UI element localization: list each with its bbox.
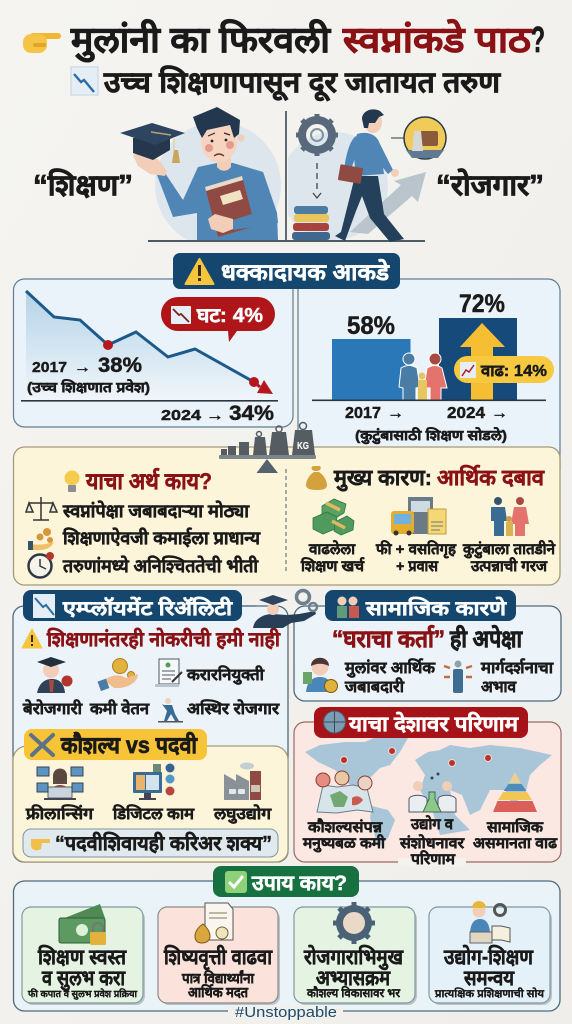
heading: main reason — [306, 464, 545, 492]
icon: pointing hand — [23, 33, 61, 53]
text: uncertainty: तरुणांमध्ये अनिश्चिततेची भीती — [62, 555, 259, 576]
text: lack of guidance: मार्गदर्शनाचा — [480, 658, 554, 677]
chart caption: (उच्च शिक्षणात प्रवेश) — [27, 379, 150, 395]
callout: career without degree: “पदवीशिवायही करिअर शक्य” — [55, 831, 272, 855]
icon: clock — [28, 552, 54, 578]
line chart — [26, 291, 254, 382]
torso and left arm — [157, 163, 278, 240]
2024 value: 2024 — [161, 407, 202, 424]
label: rising education cost: वाढलेला — [308, 540, 356, 558]
2017 value: 2017 — [32, 359, 67, 376]
yellow rising arrow — [460, 323, 505, 400]
card: job-oriented curriculum: अभ्यासक्रम — [316, 967, 391, 990]
panel: shocking stats right bar chart — [298, 279, 560, 470]
panel: meaning and main reason — [14, 447, 560, 585]
badge: skills vs degree — [24, 729, 207, 760]
panel: solutions — [14, 881, 560, 1016]
axis label 2024 — [447, 405, 508, 422]
label: unemployment: बेरोजगारी — [22, 699, 83, 718]
text: lack of guidance — [480, 658, 554, 696]
card: affordable education: व सुलभ करा — [41, 967, 126, 992]
text: financial responsibility: मुलांवर आर्थिक — [344, 658, 436, 678]
gap in panel border — [398, 858, 466, 866]
icon: scales — [26, 497, 57, 520]
card: industry education coordination: समन्वय — [463, 967, 515, 990]
section heading: impact on the country: याचा देशावर परिणाम — [348, 711, 520, 736]
panel: shocking stats left line chart — [14, 279, 293, 427]
world map — [305, 735, 552, 848]
label: education: “शिक्षण” — [33, 168, 133, 202]
section heading: employment reality — [23, 590, 242, 621]
section heading: employment reality: एम्प्लॉयमेंट रिॲलिटी — [62, 596, 233, 620]
label: fees hostel travel — [375, 540, 457, 575]
hand — [133, 153, 167, 176]
heading: no job guarantee: शिक्षणानंतरही नोकरीची हमी नाही — [46, 627, 281, 651]
text: financial responsibility: जबाबदारी — [344, 677, 405, 696]
bar: 2017 — [332, 339, 410, 400]
label: unstable employment: अस्थिर रोजगार — [187, 699, 281, 718]
icon: factory — [224, 762, 261, 800]
axis label 2017: 2017 — [345, 405, 381, 422]
line chart area — [26, 291, 272, 401]
section heading: impact on the country — [314, 707, 528, 738]
section heading: shocking stats — [173, 253, 400, 289]
label: rising education cost: शिक्षण खर्च — [300, 557, 366, 575]
title: स्वप्नांकडे पाठ — [342, 19, 533, 60]
card: industry education coordination — [429, 901, 552, 1005]
chart caption: (कुटुंबासाठी शिक्षण सोडले) — [355, 427, 507, 445]
value 72: 72% — [459, 290, 505, 318]
label: digital work: डिजिटल काम — [112, 804, 195, 823]
illustration: walking graduate heading to job — [280, 109, 446, 242]
2024 value — [161, 402, 274, 425]
section heading: solutions — [213, 866, 359, 897]
callout: career without degree — [23, 829, 278, 857]
callout: decline — [161, 297, 275, 342]
book under arm — [338, 164, 363, 184]
label: fewer skilled workforce: कौशल्यसंपन्न — [307, 818, 384, 836]
illustration: balance scale with weights — [219, 422, 316, 473]
panel: social reasons — [294, 606, 561, 701]
label: employment: “रोजगार” — [436, 168, 544, 202]
illustration: worried student with cap and book — [120, 107, 281, 248]
label: industry and research: उद्योग व — [410, 815, 454, 833]
section heading: social reasons — [325, 590, 516, 621]
subtitle: उच्च शिक्षणापासून दूर जातायत तरुण — [103, 65, 501, 102]
badge: skills vs degree: कौशल्य vs पदवी — [60, 731, 198, 758]
heading: main reason: मुख्य कारण: — [333, 465, 432, 492]
card: job-oriented curriculum: रोजगाराभिमुख — [303, 944, 404, 971]
icon: falling chart — [71, 67, 98, 95]
data points and arrow — [103, 340, 273, 394]
axis label 2017: → — [387, 405, 404, 422]
section heading: solutions: उपाय काय? — [251, 872, 347, 895]
icon: scientists — [409, 772, 456, 812]
label: fees hostel travel: + प्रवास — [396, 558, 439, 575]
text: financial responsibility — [344, 658, 436, 696]
icon: contract — [155, 659, 182, 687]
dashed arrow — [316, 163, 318, 193]
icon: confused person with arrows — [444, 660, 472, 693]
heading: head of household expectation: “घराचा कर्ता” — [332, 625, 445, 653]
title — [23, 19, 545, 63]
heading: head of household expectation — [332, 625, 523, 653]
card: industry education coordination: प्रात्यक्षिक प्रशिक्षणाची सोय — [434, 987, 545, 1000]
walker — [335, 176, 404, 242]
panel: impact on the country — [294, 722, 561, 868]
icon: inequality pyramid — [493, 772, 537, 812]
2024 value: → — [206, 407, 224, 424]
2017 value — [32, 354, 142, 377]
job circle — [391, 137, 404, 139]
label: family income need: कुटुंबाला तातडीने — [462, 540, 556, 559]
sub-panel: skills vs degree — [13, 746, 288, 862]
icon: unstable person — [158, 698, 183, 722]
card: scholarships: पात्र विद्यार्थ्यांना — [181, 970, 255, 986]
icon: money stacks — [313, 499, 354, 535]
heading: main reason: आर्थिक दबाव — [437, 464, 545, 490]
label: freelancing: फ्रीलान्सिंग — [25, 804, 94, 823]
text: earning priority: शिक्षणाऐवजी कमाईला प्राधान्य — [62, 527, 262, 548]
2024 value: 34% — [229, 402, 274, 425]
icon: family — [491, 497, 529, 536]
text: responsibility over dreams: स्वप्नांपेक्षा जबाबदाऱ्या मोठ्या — [62, 500, 250, 521]
gear — [296, 114, 338, 156]
label: industry and research — [399, 815, 465, 868]
value 58: 58% — [347, 312, 395, 340]
card: affordable education — [22, 904, 145, 1005]
icon: family — [399, 353, 447, 400]
label: contract appointment: करारनियुक्ती — [186, 665, 265, 685]
label: family income need — [462, 540, 556, 575]
section heading: shocking stats: धक्कादायक आकडे — [221, 258, 390, 285]
icon: map with pins — [316, 771, 373, 813]
heading: meaning: याचा अर्थ काय? — [85, 467, 212, 494]
icon: unemployed graduate — [37, 657, 72, 693]
icon: freelancer — [37, 767, 83, 800]
book hand — [208, 214, 233, 233]
text: lack of guidance: अभाव — [481, 679, 517, 696]
label: social inequality: सामाजिक — [486, 818, 545, 836]
label: fewer skilled workforce: मनुष्यबळ कमी — [302, 834, 386, 853]
label: industry and research: परिणाम — [410, 850, 456, 868]
card: affordable education: शिक्षण स्वस्त — [37, 944, 127, 969]
label: low wage: कमी वेतन — [89, 699, 150, 718]
right arm — [233, 172, 278, 230]
callout: decline: घट: 4% — [196, 305, 263, 327]
label: small industry: लघुउद्योग — [213, 804, 272, 824]
badge: growth: वाढ: 14% — [480, 363, 547, 380]
bar: 2024 — [439, 318, 517, 400]
label: fewer skilled workforce — [302, 818, 386, 853]
connector line — [242, 605, 256, 607]
icon: burdened child — [303, 658, 338, 692]
icon: digital work — [133, 764, 174, 800]
badge: growth — [454, 356, 554, 383]
icon: low pay — [98, 658, 138, 691]
up arrow — [350, 172, 426, 234]
axis label 2024: → — [491, 405, 508, 422]
card: scholarships: शिष्यवृत्ती वाढवा — [163, 944, 273, 971]
label: industry and research: संशोधनावर — [399, 834, 465, 852]
icon: bus and hostel — [391, 497, 446, 536]
illustration: thinking graduate with gears — [253, 590, 317, 628]
card: job-oriented curriculum — [294, 902, 417, 1005]
card: industry education coordination: उद्योग-शिक्षण — [443, 944, 534, 969]
label: fees hostel travel: फी + वसतिगृह — [375, 540, 457, 559]
label: rising education cost — [300, 540, 366, 575]
label: social inequality: असमानता वाढ — [473, 835, 558, 852]
cap — [133, 137, 170, 160]
heading: head of household expectation: ही अपेक्षा — [449, 625, 523, 653]
map pins — [340, 748, 492, 766]
axis label 2017 — [345, 405, 404, 422]
ground line — [148, 240, 425, 242]
card: job-oriented curriculum: कौशल्य विकासावर भर — [306, 986, 401, 1000]
title: ? — [531, 19, 545, 60]
card: affordable education: फी कपात व सुलभ प्रवेश प्रक्रिया — [27, 988, 138, 1000]
2017 value: 38% — [98, 354, 142, 377]
book — [205, 176, 255, 237]
icon: coins in hand — [28, 528, 54, 550]
divider — [285, 111, 287, 240]
section heading: social reasons: सामाजिक कारणे — [365, 596, 508, 620]
books — [292, 206, 330, 240]
2017 value: → — [74, 359, 91, 376]
title: मुलांनी का फिरवली — [70, 19, 332, 63]
panel: employment reality — [13, 606, 288, 862]
label: family income need: उत्पन्नाची गरज — [470, 557, 548, 575]
card: scholarships — [158, 903, 280, 1005]
axis label 2024: 2024 — [447, 405, 485, 422]
footer hashtag: #Unstoppable — [235, 1004, 337, 1021]
illustration: balance scale with weights: KG — [297, 441, 309, 452]
card: scholarships: आर्थिक मदत — [188, 984, 249, 1000]
head — [201, 122, 237, 162]
label: social inequality — [473, 818, 558, 852]
